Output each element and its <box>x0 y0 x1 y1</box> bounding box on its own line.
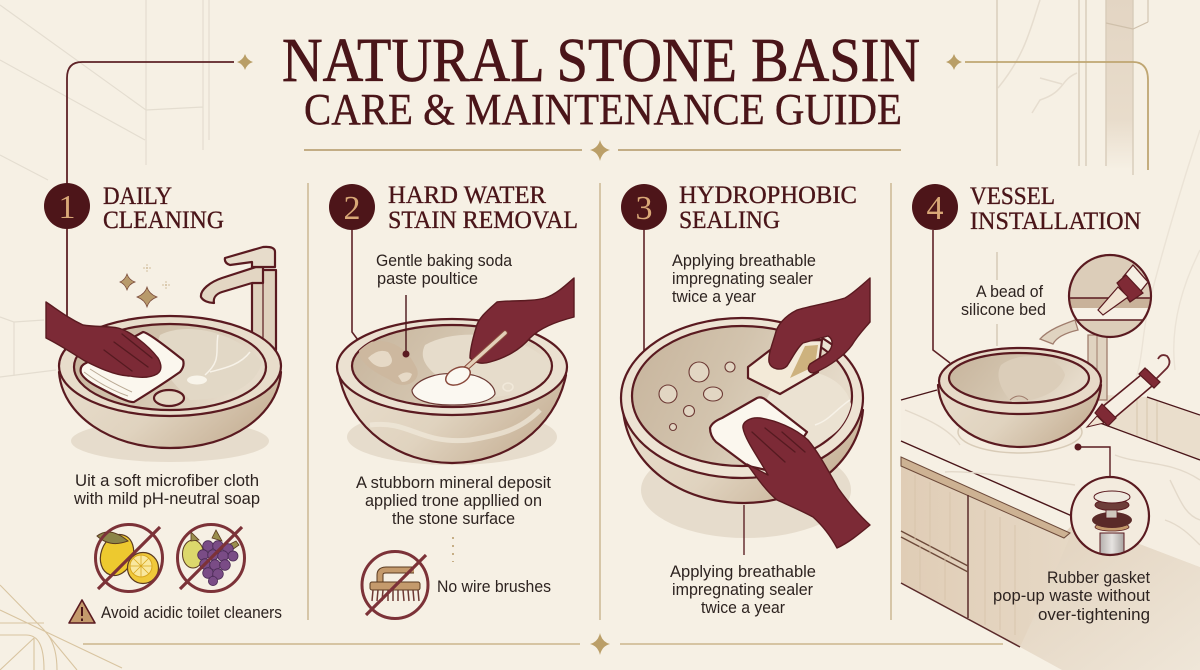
callout: baking soda paste: Gentle baking soda <box>376 251 512 270</box>
panel: step 1 daily cleaning <box>44 183 282 623</box>
caption 2: the stone surface <box>392 509 515 528</box>
step 4 number badge <box>912 184 958 230</box>
basin 4 <box>938 348 1101 453</box>
caption 1: with mild pH-neutral soap <box>73 489 260 508</box>
step 2 heading: HARD WATER <box>388 182 546 209</box>
sponge <box>748 340 822 394</box>
sparkles <box>120 264 170 307</box>
step 4 connector <box>933 230 950 363</box>
callout: bead of silicone <box>961 252 1046 346</box>
step 1 heading <box>103 183 224 234</box>
basin 1 <box>59 316 281 462</box>
caption 3: impregnating sealer <box>672 580 813 599</box>
caption 2: applied trone appllied on <box>365 491 542 510</box>
step 4 heading <box>970 183 1141 235</box>
step 3 number badge <box>621 184 667 230</box>
title <box>282 27 920 134</box>
basin 2 <box>337 319 567 465</box>
step 2 number badge <box>329 184 375 230</box>
icon: no lemons <box>95 524 162 592</box>
connector: title right gold line <box>946 54 1148 170</box>
magnifier: silicone bead <box>1068 254 1152 338</box>
callout: baking soda paste <box>376 251 512 288</box>
cloth 1 <box>81 332 184 402</box>
icon: no grapes <box>178 524 244 592</box>
step 3 connector <box>643 230 645 352</box>
water droplets <box>659 362 735 430</box>
caption 3: twice a year <box>701 598 785 617</box>
caption 4: Rubber gasket <box>1047 568 1150 587</box>
faucet 4 <box>1040 320 1107 400</box>
callout: sealer top <box>672 251 816 306</box>
marble countertop <box>901 397 1200 567</box>
silicone caulk gun <box>1087 355 1170 427</box>
step 4 heading: VESSEL <box>970 183 1055 210</box>
background: marble wall and columns top right <box>997 0 1200 395</box>
step 3 heading <box>679 182 857 234</box>
background: gold deco corner bottom left <box>0 585 122 670</box>
magnifier: pop-up waste <box>1071 477 1149 559</box>
basin 3 <box>621 318 863 538</box>
panel: step 2 hard water stain removal <box>329 182 578 618</box>
step 3 number badge: 3 <box>636 190 652 227</box>
background: gold deco corner bottom right <box>1172 622 1200 670</box>
icon: no wire brush <box>362 552 428 618</box>
step 3 heading: SEALING <box>679 207 780 234</box>
title: NATURAL STONE BASIN <box>282 27 920 95</box>
callout: bead of silicone: A bead of <box>976 282 1043 301</box>
step 2 heading: STAIN REMOVAL <box>388 207 578 234</box>
wooden vanity <box>901 457 1070 647</box>
step 2 connector <box>352 230 358 340</box>
caption 4: over-tightening <box>1038 605 1150 624</box>
callout: sealer top: Applying breathable <box>672 251 816 270</box>
connector: title to step 1 <box>67 54 253 320</box>
hand 3 bottom <box>743 418 870 548</box>
column dividers <box>308 183 891 620</box>
step 3 heading: HYDROPHOBIC <box>679 182 857 209</box>
hand 1 <box>46 302 161 377</box>
panel: step 4 vessel installation <box>901 183 1200 670</box>
countertop edges and veins <box>901 390 1200 545</box>
callout: baking soda paste: paste poultice <box>377 269 478 288</box>
caption 4 <box>993 568 1150 624</box>
step 4 number badge: 4 <box>926 190 944 227</box>
step 1 heading: CLEANING <box>103 207 224 234</box>
pointer: bottom caption <box>743 505 745 555</box>
bottom rule with diamond <box>83 633 1172 655</box>
label: no wire brushes: No wire brushes <box>437 577 551 596</box>
pointer: paste poultice <box>402 295 410 358</box>
step 4 heading: INSTALLATION <box>970 208 1141 235</box>
floor shadow <box>1000 520 1200 670</box>
caption 3: Applying breathable <box>670 562 816 581</box>
step 2 number badge: 2 <box>344 190 360 227</box>
hand 2 with spoon <box>443 278 574 389</box>
step 1 heading: DAILY <box>103 183 172 210</box>
warning note <box>69 600 282 623</box>
callout: sealer top: impregnating sealer <box>672 269 813 288</box>
cloth 3 <box>710 397 807 473</box>
caption 2 <box>356 473 551 528</box>
warning note: Avoid acidic toilet cleaners <box>101 603 282 622</box>
step 1 number badge <box>44 183 90 229</box>
callout: sealer top: twice a year <box>672 287 756 306</box>
title: CARE & MAINTENANCE GUIDE <box>304 85 902 134</box>
caption 1: Uit a soft microfiber cloth <box>75 471 259 490</box>
title rule with diamond <box>304 140 901 161</box>
callout: bead of silicone: silicone bed <box>961 300 1046 319</box>
step 2 heading <box>388 182 578 234</box>
caption 4: pop-up waste without <box>993 586 1150 605</box>
caption 2: A stubborn mineral deposit <box>356 473 551 492</box>
caption 3 <box>670 562 816 617</box>
back shelf <box>1100 395 1200 460</box>
hand 3 top <box>769 278 870 373</box>
faucet <box>201 247 276 350</box>
panel: step 3 hydrophobic sealing <box>621 182 870 617</box>
caption 1 <box>73 471 260 508</box>
background: architectural lines top left <box>0 0 209 377</box>
dotted connector <box>452 537 454 562</box>
pointer: pop-up waste <box>1074 444 1110 477</box>
step 1 number badge: 1 <box>58 189 76 226</box>
